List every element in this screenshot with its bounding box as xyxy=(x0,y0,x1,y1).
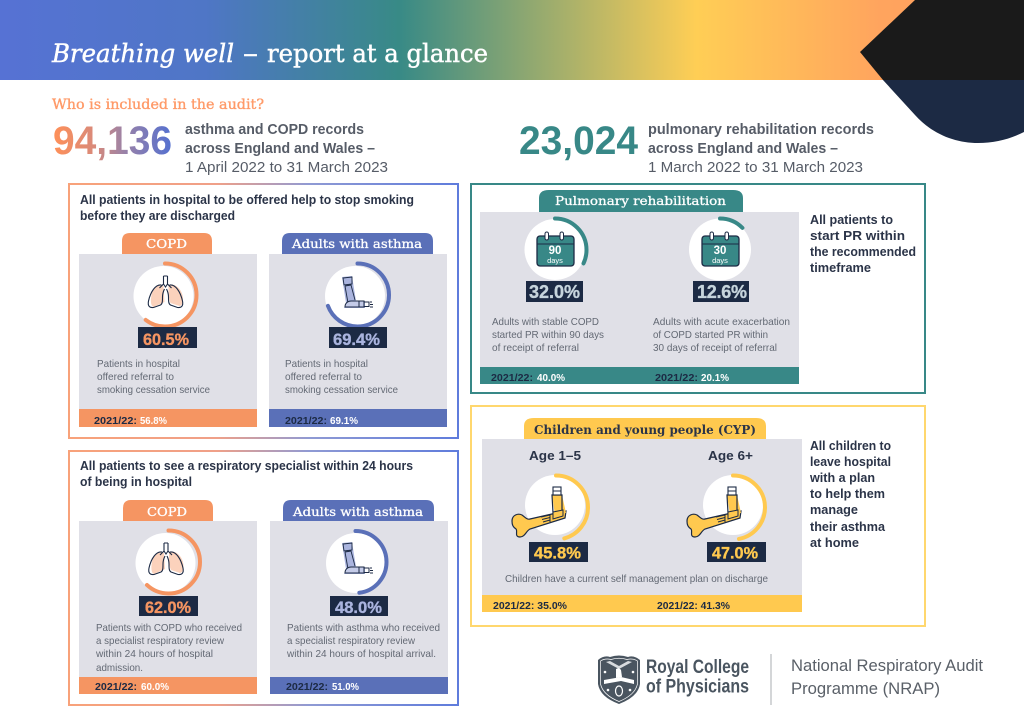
side note: PR: start PR within xyxy=(810,228,905,243)
side note: CYP: at home xyxy=(810,535,859,550)
side note: PR xyxy=(810,212,916,275)
side note: CYP: with a plan xyxy=(809,470,875,485)
previous-year bar xyxy=(480,367,799,384)
previous-year bar xyxy=(482,595,802,612)
card: asthma specialist: 48.0% xyxy=(335,598,382,617)
card: COPD smoking: 56.8% xyxy=(140,415,168,427)
previous-year bar: 40.0% xyxy=(537,372,566,384)
side note: CYP: their asthma xyxy=(810,519,886,534)
card: COPD specialist: Patients with COPD who received xyxy=(96,622,242,634)
side note: PR: timeframe xyxy=(810,260,871,275)
metric: age 1-5: 45.8% xyxy=(534,544,581,562)
metric: age 6+: 47.0% xyxy=(712,544,758,562)
card: COPD smoking: offered referral to xyxy=(97,371,174,383)
header banner xyxy=(0,0,1024,80)
logo: Royal College of Physicians xyxy=(598,656,749,704)
panel: respiratory specialist xyxy=(69,451,458,705)
side note: CYP xyxy=(809,438,891,550)
programme name: Programme (NRAP) xyxy=(791,679,940,698)
card background xyxy=(482,439,802,595)
stat: asthma and COPD records: asthma and COPD records xyxy=(185,122,364,138)
title: report at a glance xyxy=(267,39,488,68)
card: asthma smoking: 69.1% xyxy=(330,415,359,427)
previous-year bar: 2021/22: 41.3% xyxy=(657,600,731,612)
card: asthma specialist: within 24 hours of hospital arrival. xyxy=(286,648,436,660)
card: COPD specialist: 62.0% xyxy=(145,598,191,617)
stat: pulmonary rehabilitation records: 23,024 xyxy=(519,119,638,163)
heading: respiratory specialist: of being in hospital xyxy=(80,474,192,489)
icon: inhaler xyxy=(342,542,373,574)
side note: CYP: to help them xyxy=(810,486,885,501)
metric: 30 days: 30 days of receipt of referral xyxy=(653,342,777,354)
stat: pulmonary rehabilitation records xyxy=(519,119,874,176)
heading: respiratory specialist xyxy=(80,458,413,489)
card: COPD specialist: a specialist respiratory review xyxy=(96,635,224,647)
side note: CYP: manage xyxy=(810,502,858,517)
metric: age 1-5: Age 1–5 xyxy=(529,448,581,463)
tab: pulmonary rehabilitation xyxy=(539,190,743,212)
card: COPD smoking xyxy=(79,233,257,427)
card: asthma specialist: a specialist respiratory review xyxy=(287,635,415,647)
card: COPD smoking: 60.5% xyxy=(143,330,189,349)
programme name: National Respiratory Audit xyxy=(791,656,983,675)
metric: age 6+: Age 6+ xyxy=(708,448,753,463)
corner shape: black upper part xyxy=(860,0,1024,80)
tab: pulmonary rehabilitation: Pulmonary rehabilitation xyxy=(555,193,726,208)
card: COPD specialist: within 24 hours of hospital xyxy=(95,648,213,660)
card: COPD smoking: smoking cessation service xyxy=(97,384,210,396)
heading: stop smoking: All patients in hospital to be offered help to stop smoking xyxy=(80,192,414,207)
icon: calendar 90 days: 90 xyxy=(549,245,561,257)
heading: stop smoking xyxy=(80,192,414,223)
card: asthma smoking: 69.4% xyxy=(333,330,380,349)
metric: age 6+ xyxy=(687,448,766,562)
card: COPD specialist: admission. xyxy=(96,662,143,674)
stat: pulmonary rehabilitation records: across England and Wales – xyxy=(648,141,838,157)
metric: 90 days: of receipt of referral xyxy=(492,342,579,354)
previous-year bar: 2021/22: xyxy=(655,372,698,384)
icon: inhaler xyxy=(342,276,373,308)
logo: Royal College of Physicians: Royal College xyxy=(646,657,749,678)
stat: pulmonary rehabilitation records: 1 March 2022 to 31 March 2023 xyxy=(648,160,863,176)
side note: PR: the recommended xyxy=(810,244,916,259)
stat: asthma and COPD records: 94,136 xyxy=(53,119,172,163)
side note: CYP: leave hospital xyxy=(810,454,891,469)
metric: 90 days: Adults with stable COPD xyxy=(492,316,599,328)
heading: respiratory specialist: All patients to see a respiratory specialist within 24 hours xyxy=(80,458,413,473)
metric: 30 days xyxy=(653,218,790,354)
icon: spacer and inhaler xyxy=(512,487,566,537)
corner shape: navy lower part xyxy=(883,80,1024,143)
card: COPD specialist xyxy=(79,500,257,694)
audit heading: Who is included in the audit? xyxy=(52,97,264,113)
card: asthma smoking: offered referral to xyxy=(285,371,362,383)
card: COPD smoking: COPD xyxy=(146,236,187,251)
programme name xyxy=(791,656,983,698)
previous-year bar: 20.1% xyxy=(701,372,730,384)
tab: CYP: Children and young people (CYP) xyxy=(534,422,756,437)
tab: CYP xyxy=(524,418,766,439)
icon: calendar 90 days xyxy=(537,232,574,266)
card: asthma smoking: Patients in hospital xyxy=(285,358,368,370)
panel: pulmonary rehabilitation xyxy=(471,184,925,393)
previous-year bar: 2021/22: xyxy=(491,372,533,384)
icon: spacer and inhaler xyxy=(687,487,741,537)
heading: stop smoking: before they are discharged xyxy=(80,208,235,223)
card: asthma specialist: Patients with asthma who received xyxy=(287,622,440,634)
title: Breathing well xyxy=(51,39,234,68)
card: asthma specialist: 2021/22: xyxy=(286,681,328,693)
icon: lungs xyxy=(149,543,184,575)
stat: asthma and COPD records: 1 April 2022 to 31 March 2023 xyxy=(185,160,388,176)
card: asthma specialist: 51.0% xyxy=(332,681,360,693)
panel: children and young people xyxy=(471,406,925,626)
card: asthma specialist: Adults with asthma xyxy=(292,504,424,519)
card: asthma smoking: smoking cessation service xyxy=(285,384,398,396)
title xyxy=(51,39,488,68)
stat: pulmonary rehabilitation records: pulmonary rehabilitation records xyxy=(648,122,874,138)
card: COPD specialist: 60.0% xyxy=(141,681,170,693)
metric: 90 days xyxy=(492,218,604,354)
metric: 30 days: 12.6% xyxy=(697,282,747,302)
caption: self management plan: Children have a current self management plan on discharge xyxy=(505,573,768,585)
card: COPD smoking: 2021/22: xyxy=(94,415,137,427)
card: asthma smoking xyxy=(269,233,447,427)
card: COPD specialist: COPD xyxy=(147,504,187,519)
metric: 90 days: 32.0% xyxy=(529,282,580,302)
stat: asthma and COPD records xyxy=(53,119,388,176)
side note: PR: All patients to xyxy=(810,212,893,227)
panel: stop smoking xyxy=(69,184,458,438)
card: asthma smoking: Adults with asthma xyxy=(291,236,423,251)
icon: lungs xyxy=(148,276,183,308)
metric: 30 days: Adults with acute exacerbation xyxy=(653,316,790,328)
title: – xyxy=(243,39,258,68)
metric: age 1-5 xyxy=(512,448,588,562)
icon: crest xyxy=(598,656,640,704)
side note: CYP: All children to xyxy=(810,438,891,453)
stat: asthma and COPD records: across England and Wales – xyxy=(185,141,375,157)
icon: calendar 90 days: days xyxy=(547,256,563,265)
icon: calendar 30 days xyxy=(702,232,739,266)
previous-year bar: 2021/22: 35.0% xyxy=(493,600,568,612)
icon: calendar 30 days: 30 xyxy=(714,245,726,257)
card: COPD smoking: Patients in hospital xyxy=(97,358,180,370)
card: asthma specialist xyxy=(270,500,448,694)
metric: 30 days: of COPD started PR within xyxy=(653,329,768,341)
icon: calendar 30 days: days xyxy=(712,256,728,265)
logo: Royal College of Physicians: of Physicians xyxy=(646,676,749,698)
card: COPD specialist: 2021/22: xyxy=(95,681,137,693)
metric: 90 days: started PR within 90 days xyxy=(492,329,604,341)
card background xyxy=(480,212,799,367)
card: asthma smoking: 2021/22: xyxy=(285,415,327,427)
